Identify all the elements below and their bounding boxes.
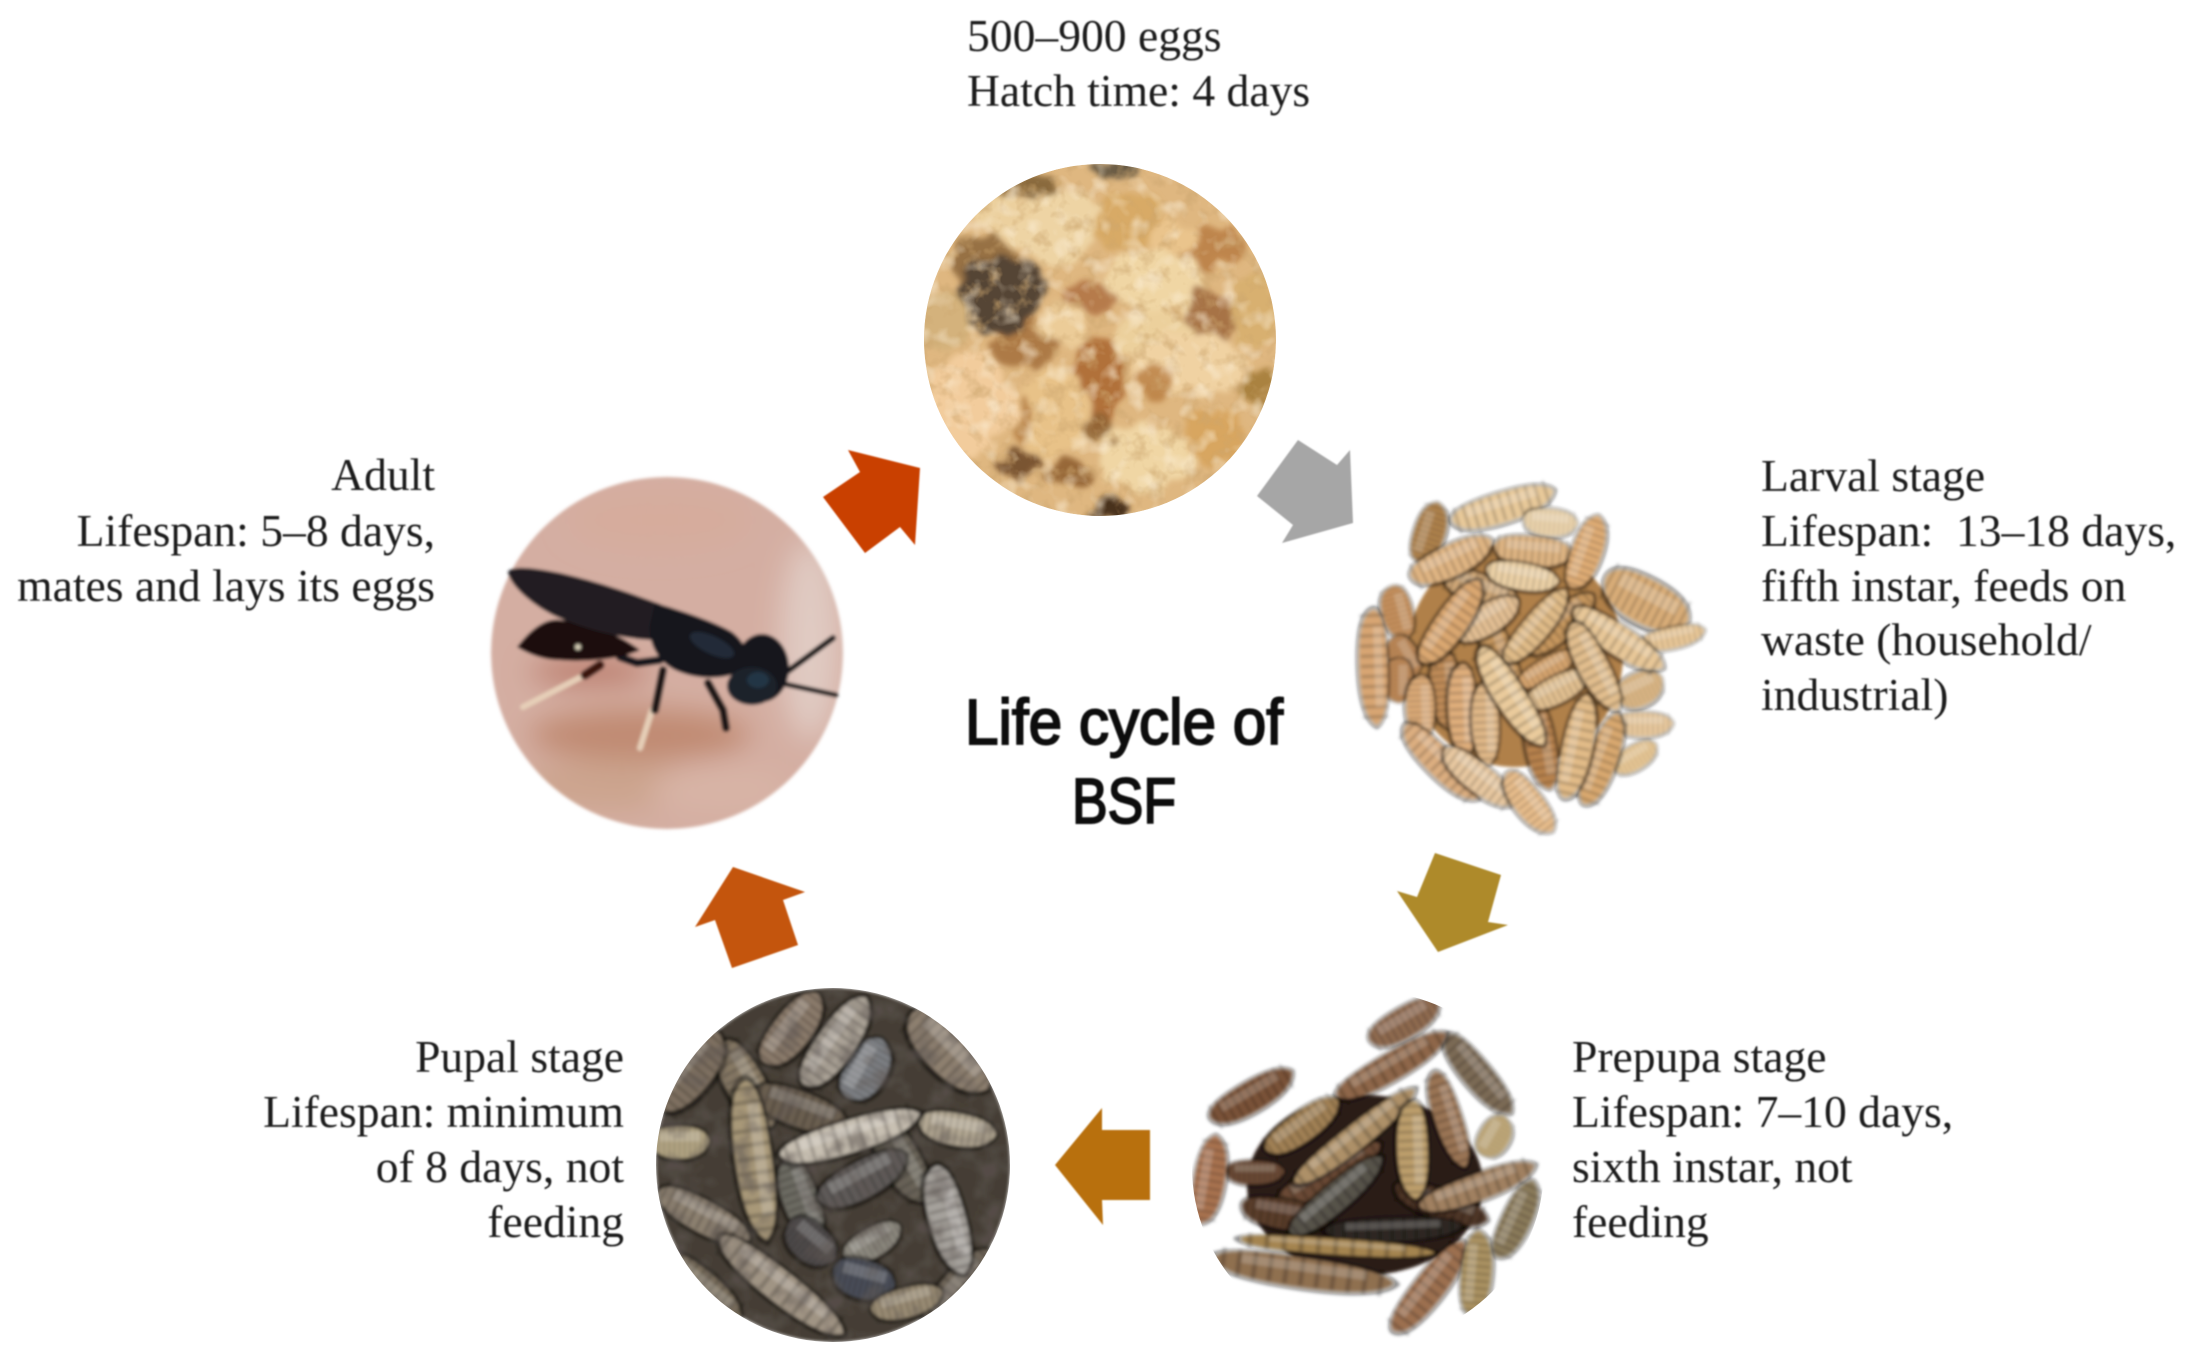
text: pupal stage: [263, 1031, 624, 1247]
icon: fly legs: [523, 638, 836, 748]
text: prepupa stage: feeding: [1572, 1196, 1709, 1247]
text: pupal stage: of 8 days, not: [376, 1141, 624, 1192]
text: pupal stage: Pupal stage: [415, 1031, 624, 1082]
text: prepupa stage: Prepupa stage: [1572, 1031, 1826, 1082]
text: egg stage: [967, 10, 1310, 116]
title: BSF: [1072, 765, 1176, 837]
text: pupal stage: feeding: [487, 1196, 624, 1247]
photo: eggs: [918, 159, 1280, 521]
arrow: pupa to adult: [695, 867, 805, 968]
arrow: eggs to larva: [1257, 440, 1353, 543]
text: larval stage: Larval stage: [1761, 450, 1985, 501]
title: Life cycle of: [965, 686, 1283, 758]
text: adult stage: [17, 449, 435, 611]
text: prepupa stage: Lifespan: 7–10 days,: [1572, 1086, 1953, 1137]
arrow: prepupa to pupa: [1055, 1108, 1150, 1225]
text: prepupa stage: sixth instar, not: [1572, 1141, 1853, 1192]
text: adult stage: Lifespan: 5–8 days,: [77, 505, 435, 556]
photo: pupae: [656, 988, 1010, 1342]
text: prepupa stage: [1572, 1031, 1953, 1247]
text: egg stage: Hatch time: 4 days: [967, 65, 1310, 116]
text: larval stage: industrial): [1761, 669, 1948, 720]
text: pupal stage: Lifespan: minimum: [263, 1086, 624, 1137]
photo: larvae: [1354, 474, 1709, 845]
text: larval stage: [1761, 450, 2176, 720]
photo: adult fly: [491, 477, 843, 829]
text: larval stage: waste (household/: [1761, 614, 2092, 665]
arrow: adult to eggs: [823, 450, 920, 553]
text: egg stage: 500–900 eggs: [967, 10, 1222, 61]
text: larval stage: fifth instar, feeds on: [1761, 560, 2127, 611]
text: adult stage: mates and lays its eggs: [17, 560, 435, 611]
text: adult stage: Adult: [331, 449, 435, 500]
icon: fly body: [508, 568, 789, 705]
arrow: larva to prepupa: [1397, 853, 1508, 952]
photo: prepupae: [1184, 986, 1552, 1346]
title: [965, 686, 1283, 837]
text: larval stage: Lifespan: 13–18 days,: [1761, 505, 2176, 556]
